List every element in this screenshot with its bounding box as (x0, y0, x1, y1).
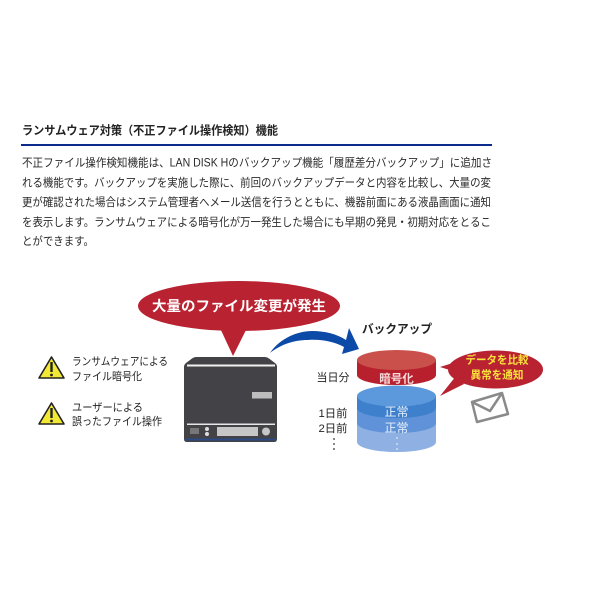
warning: ransomware encryption (39, 355, 168, 383)
backup generation labels (316, 370, 350, 450)
cylinder: normal backups: 正常 (384, 405, 409, 419)
speech bubble: mass file change: 大量のファイル変更が発生 (152, 298, 326, 314)
warning: ransomware encryption: ファイル暗号化 (72, 370, 142, 383)
warning: ransomware encryption: ランサムウェアによる (72, 355, 168, 368)
cylinder: normal backups (357, 386, 436, 452)
body text: を表示します。ランサムウェアによる暗号化が万一発生した場合にも早期の発見・初期対応をとるこ (22, 215, 491, 229)
backup generation labels: 1日前 (318, 406, 348, 420)
body text: とができます。 (22, 234, 94, 248)
backup generation labels: 当日分 (316, 370, 350, 384)
body text (22, 156, 492, 248)
backup label: バックアップ (362, 322, 432, 336)
heading rule (21, 144, 492, 146)
cylinder: encrypted backup: 暗号化 (379, 372, 414, 386)
speech bubble: mass file change (138, 281, 340, 356)
body text: れる機能です。バックアップを実施した際に、前回のバックアップデータと内容を比較し、大量の変 (22, 176, 491, 190)
icon: LAN DISK device (184, 357, 277, 442)
arrow: device to backup (270, 328, 359, 354)
body text: 更が確認された場合はシステム管理者へメール送信を行うとともに、機器前面にある液晶画面に通知 (22, 195, 491, 209)
warning: user error: ユーザーによる (72, 401, 143, 414)
icon: envelope (472, 393, 508, 422)
warning: user error: 誤ったファイル操作 (72, 414, 162, 428)
cylinder: normal backups: 正常 (384, 421, 409, 435)
cylinder: encrypted backup (357, 350, 436, 386)
heading: ランサムウェア対策（不正ファイル操作検知）機能 (22, 124, 278, 138)
callout: compare data, notify anomaly (440, 350, 543, 396)
callout: compare data, notify anomaly: データを比較 (466, 352, 528, 366)
warning: user error (39, 401, 162, 428)
callout: compare data, notify anomaly: 異常を通知 (470, 368, 524, 382)
backup generation labels: 2日前 (318, 421, 348, 435)
body text: 不正ファイル操作検知機能は、LAN DISK Hのバックアップ機能「履歴差分バックアップ」に追加さ (22, 156, 492, 170)
